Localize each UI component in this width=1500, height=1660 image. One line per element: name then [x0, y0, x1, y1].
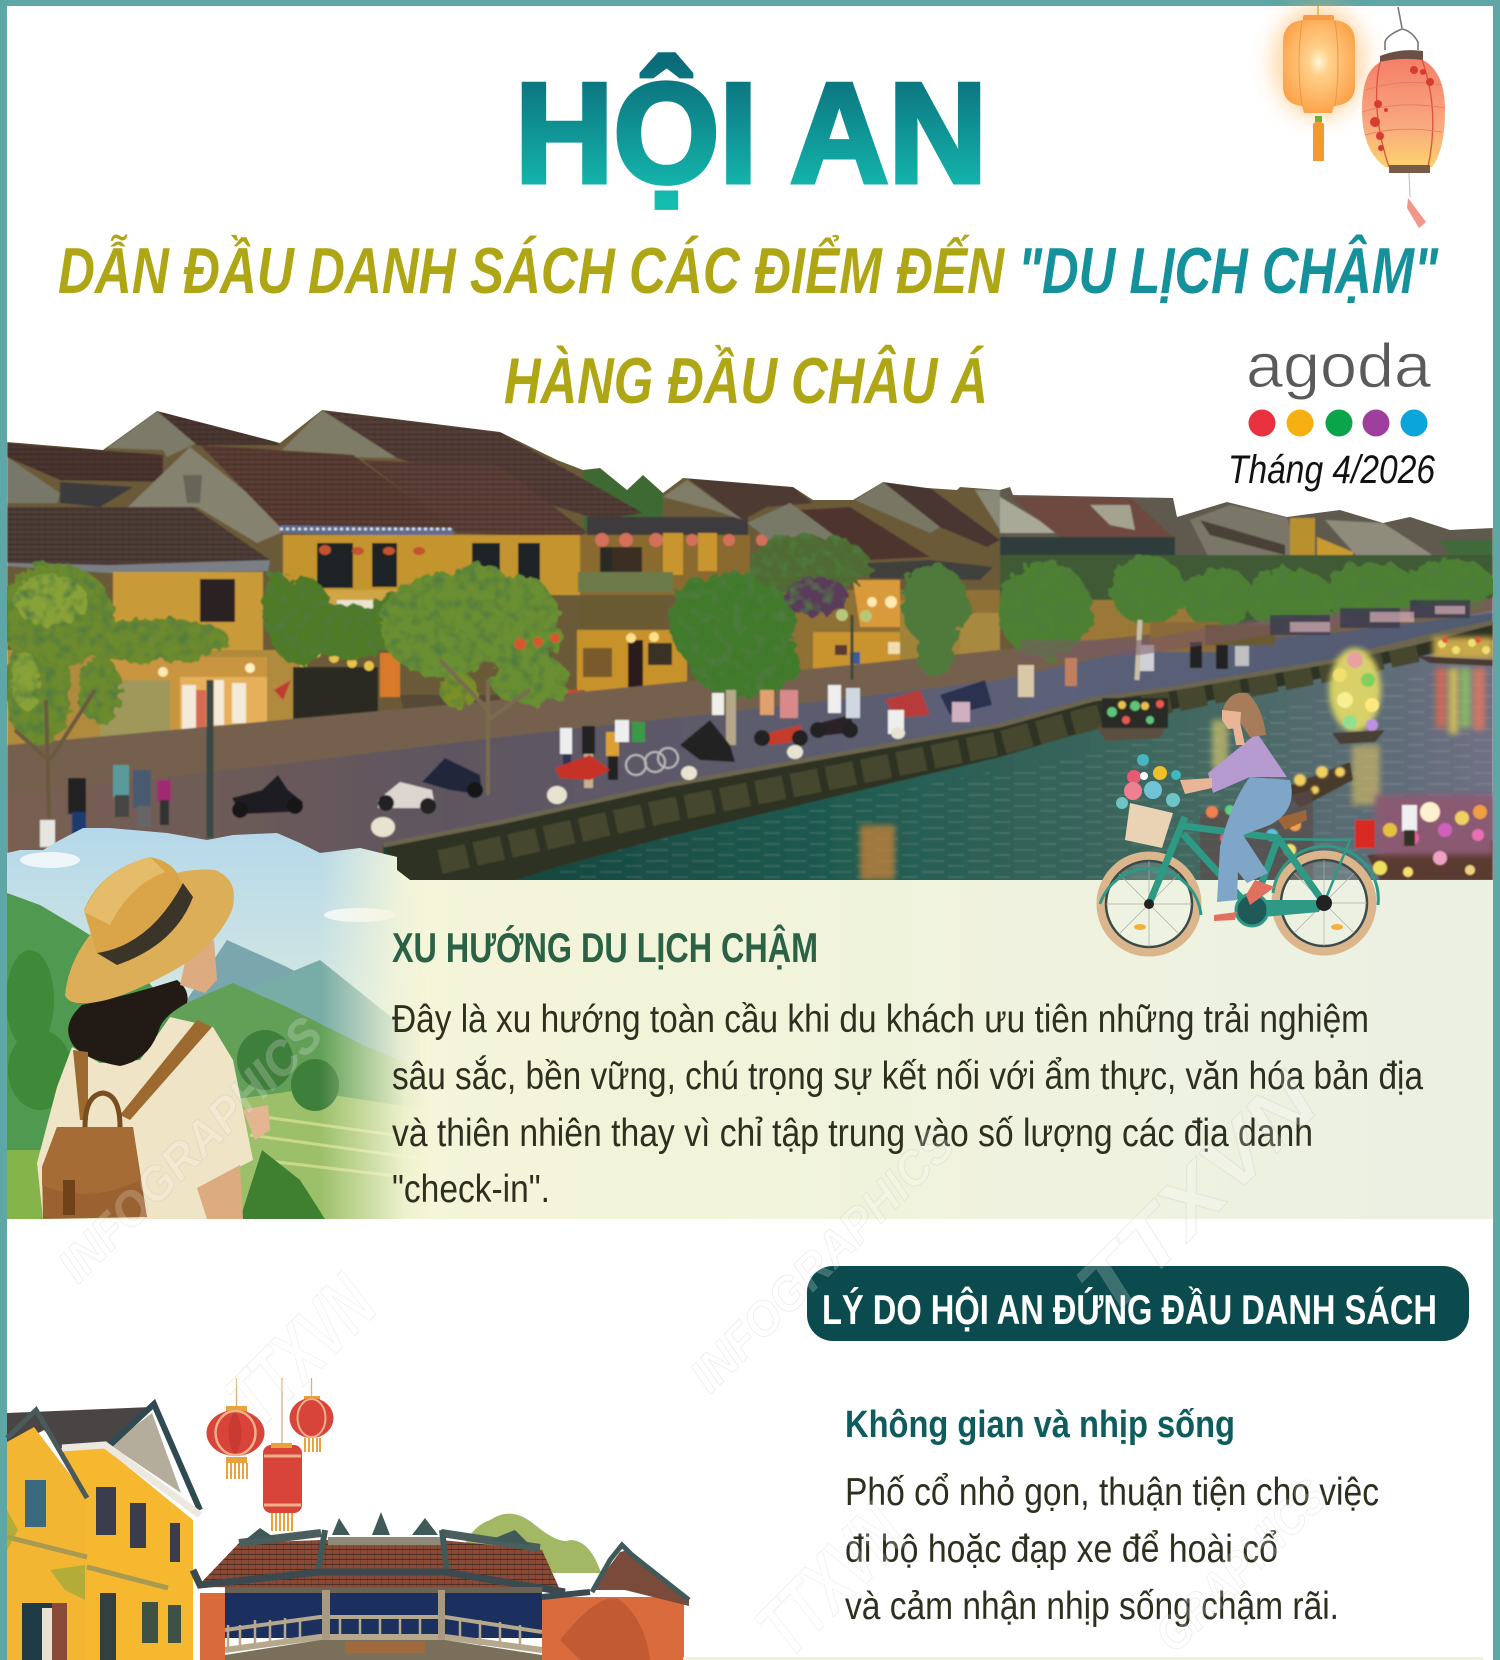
middle terrace — [576, 478, 1196, 692]
illustration: woman on bicycle with flowers — [1100, 693, 1378, 952]
icon: orange lantern — [1273, 6, 1365, 161]
watermark — [48, 1008, 1338, 1660]
text block: space and rhythm description — [845, 1471, 1379, 1628]
straps and backpack — [73, 1020, 212, 1120]
bottom panel edge — [683, 1657, 1483, 1660]
shirt — [37, 1017, 253, 1219]
riverside trees — [0, 535, 1494, 746]
text block: space and rhythm description: đi bộ hoặc đạp xe để hoài cổ — [845, 1528, 1278, 1571]
hair — [68, 980, 188, 1066]
watermark: TTXVN — [209, 1258, 393, 1442]
subtitle — [58, 234, 1439, 417]
watermark: INFOGRAPHICS — [680, 1118, 965, 1403]
mid-distance trees behind houses — [583, 468, 663, 530]
heading: slow travel trend: XU HƯỚNG DU LỊCH CHẬM — [392, 923, 818, 971]
lamp post — [206, 680, 214, 838]
text block: slow travel description: "check-in". — [392, 1168, 550, 1211]
watermark: TTXVN — [1059, 1055, 1336, 1332]
roofs, left group — [7, 410, 643, 573]
text block: slow travel description: Đây là xu hướng toàn cầu khi du khách ưu tiên những trải nghiệm — [392, 998, 1369, 1041]
illustration: yellow old house — [7, 1404, 200, 1660]
icon: three red lanterns — [206, 1378, 334, 1531]
lantern boats — [1097, 637, 1493, 880]
far right rooftops — [1000, 490, 1493, 625]
riverside road — [7, 613, 1493, 853]
subtitle: DẪN ĐẦU DANH SÁCH CÁC ĐIỂM ĐẾN — [58, 234, 1006, 307]
tree trunks and shopfronts between trees — [15, 609, 1275, 850]
pavement — [7, 598, 1493, 805]
subtitle: HÀNG ĐẦU CHÂU Á — [504, 344, 988, 417]
text block: space and rhythm description: và cảm nhận nhịp sống chậm rãi. — [845, 1585, 1339, 1628]
hat — [65, 869, 234, 1003]
illustration: hiker with straw hat — [6, 825, 432, 1225]
illustration: Japanese covered bridge — [193, 1512, 689, 1660]
quay wall — [383, 620, 1493, 885]
text block: space and rhythm description: Phố cổ nhỏ gọn, thuận tiện cho việc — [845, 1471, 1379, 1514]
ground floor shops, left — [7, 649, 586, 746]
yellow walls, left group — [113, 535, 583, 657]
arm and hand — [197, 1165, 243, 1219]
night reflections — [860, 668, 1485, 880]
icon: red hanging lantern — [1362, 7, 1445, 228]
section banner — [807, 1266, 1469, 1341]
panel: slow travel trend — [6, 825, 1493, 1225]
watermark: INFOGRAPHICS — [48, 1008, 333, 1293]
crowds and motorbikes — [68, 600, 1493, 842]
logo: agoda: agoda — [1246, 332, 1432, 401]
face — [180, 940, 217, 993]
watermark: GRAPHICS — [1145, 1470, 1338, 1660]
date label: Tháng 4/2026 — [1228, 448, 1436, 492]
heading: space and rhythm of life: Không gian và nhịp sống — [845, 1404, 1235, 1446]
text block: slow travel description: và thiên nhiên thay vì chỉ tập trung vào số lượng các địa danh — [392, 1112, 1313, 1155]
photo: Hoi An riverside old town — [0, 400, 1494, 885]
logo: agoda — [1246, 332, 1432, 436]
title: Hội An: HỘI AN — [515, 54, 987, 213]
text block: slow travel description — [392, 998, 1423, 1211]
water — [383, 610, 1493, 885]
